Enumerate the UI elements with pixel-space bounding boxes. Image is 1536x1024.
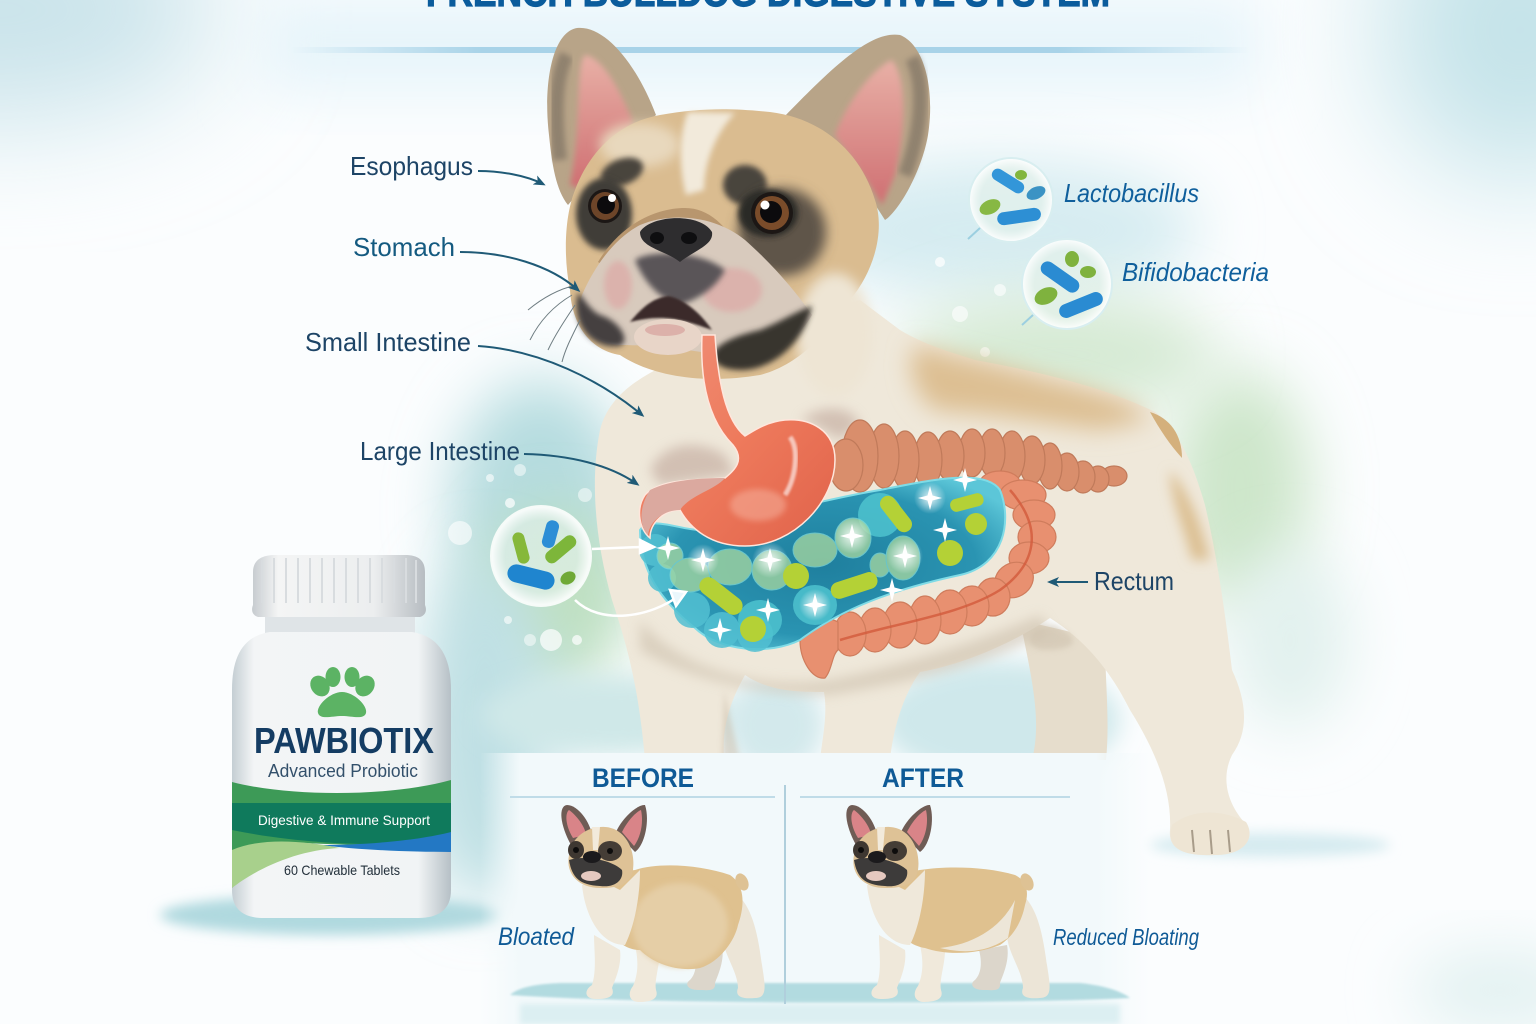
right eye socket <box>738 189 798 237</box>
muzzle centre shadow <box>635 253 725 305</box>
small dog: bloated <box>561 805 765 1002</box>
head <box>566 109 879 379</box>
bottle cap <box>252 555 426 617</box>
right ear <box>785 35 930 220</box>
hip tan patch <box>1170 470 1210 560</box>
rear paw <box>1171 813 1250 855</box>
panel: before and after <box>480 753 1199 1024</box>
heading underlines <box>510 796 1070 798</box>
bottle body <box>232 632 451 918</box>
arrow: Esophagus <box>478 171 543 184</box>
brow patches <box>597 152 767 205</box>
upper large intestine coil <box>829 420 1127 493</box>
dark band <box>232 803 451 844</box>
leg shading <box>722 625 1073 760</box>
sparkles <box>656 468 977 642</box>
arrow: Small Intestine <box>478 346 642 415</box>
label: Stomach: Stomach <box>353 232 455 262</box>
label: Small Intestine: Small Intestine <box>305 327 471 357</box>
neck cream <box>797 273 873 397</box>
neck folds behind stomach <box>650 409 860 485</box>
arrow: Rectum <box>1050 581 1088 583</box>
belly shading <box>640 615 1050 695</box>
arrow: Stomach <box>460 252 578 290</box>
small dog: reduced bloating <box>846 805 1050 1002</box>
digestive system <box>639 335 1127 678</box>
tail stub <box>1150 412 1182 458</box>
green probiotic tablets <box>696 492 987 642</box>
intestine green bubbles <box>657 518 920 592</box>
esophagus and stomach <box>640 335 835 546</box>
heading: before: BEFORE <box>592 763 694 793</box>
rod bacteria <box>506 519 579 592</box>
small intestine blue <box>640 478 1005 649</box>
French bulldog main illustration <box>528 28 1250 855</box>
jowl shadow right <box>713 306 812 370</box>
tablet count: 60 Chewable Tablets <box>284 862 400 878</box>
right eye <box>751 192 793 234</box>
head lighter forehead <box>600 123 680 167</box>
far rear leg <box>1020 620 1108 760</box>
green label band <box>232 780 451 888</box>
label: Rectum: Rectum <box>1094 566 1174 596</box>
label: Large Intestine: Large Intestine <box>360 436 520 466</box>
label: Reduced Bloating: Reduced Bloating <box>1053 924 1199 950</box>
tagline: Digestive & Immune Support <box>258 812 430 828</box>
subtitle: Advanced Probiotic <box>268 761 418 781</box>
heading: after: AFTER <box>882 763 964 793</box>
label: Bloated: Bloated <box>498 923 575 951</box>
blue band accent <box>320 832 451 852</box>
whiskers <box>528 285 580 362</box>
right eye mask <box>738 188 826 276</box>
product bottle <box>232 555 451 918</box>
bubble: Bifidobacteria <box>1022 239 1112 329</box>
intestine edge lobes <box>639 534 773 652</box>
intestine cyan lobes <box>738 493 902 640</box>
arrow: Large Intestine <box>524 454 637 484</box>
light band accent <box>232 842 340 888</box>
colon centre line <box>840 490 1032 640</box>
muzzle <box>580 217 812 358</box>
mouth and chin <box>630 296 712 355</box>
brand name: PAWBIOTIX <box>254 720 434 761</box>
muzzle pink <box>604 261 762 312</box>
white arrows from bubble into intestine <box>575 540 686 616</box>
rectum and colon <box>800 471 1056 678</box>
body tan back patch <box>911 345 1150 430</box>
label: Bifidobacteria: Bifidobacteria <box>1122 257 1269 287</box>
bacteria bubble beside intestine <box>491 506 591 606</box>
nose <box>640 218 712 262</box>
jowl shadow left <box>576 292 624 346</box>
divider <box>784 785 786 1004</box>
title rule <box>290 47 1250 53</box>
paw logo <box>306 667 379 717</box>
left eye <box>588 189 622 223</box>
floating probiotic particles <box>448 257 1006 651</box>
bottle neck <box>265 612 415 636</box>
left ear <box>547 28 656 205</box>
label: Lactobacillus: Lactobacillus <box>1064 178 1199 208</box>
nose wrinkle <box>598 208 758 282</box>
label: Esophagus: Esophagus <box>350 151 473 181</box>
left eye mask <box>576 178 632 250</box>
bubble: Lactobacillus <box>968 158 1053 242</box>
dog body <box>595 300 1248 855</box>
forehead blaze <box>681 112 735 195</box>
